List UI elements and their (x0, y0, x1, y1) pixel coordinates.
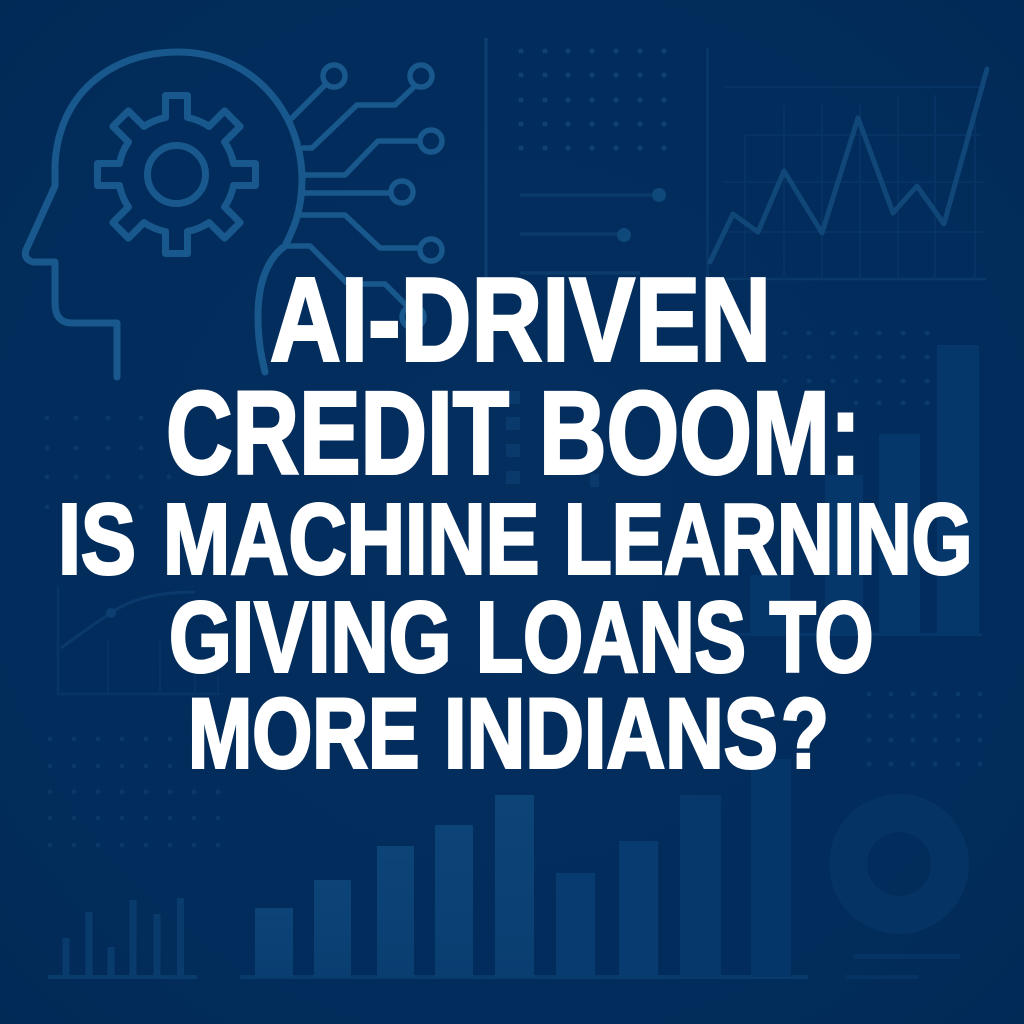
head outline (25, 52, 302, 377)
title line 2 (166, 368, 861, 500)
square dots behind title (506, 391, 599, 487)
title line 5: INDIANS (444, 678, 778, 788)
donut chart (845, 813, 960, 979)
small bar chart: bottom left (48, 898, 197, 979)
icon: AI head with gear and circuits (25, 52, 442, 377)
title line 3: MACHINE (163, 484, 540, 596)
title line 1: AI-DRIVEN (270, 254, 771, 386)
title line 5: MORE (188, 678, 420, 788)
slider indicators (520, 188, 666, 273)
title line 4: LOANS (476, 582, 746, 694)
dot grid: bottom left (48, 736, 220, 848)
dot grid: top right of bars (782, 330, 930, 406)
title line 4 (169, 582, 874, 694)
bar chart: right middle (712, 345, 982, 636)
line chart: top right (707, 48, 987, 279)
dot grid: left middle (44, 416, 172, 510)
title line 5: ? (781, 678, 829, 788)
title line 3: IS (58, 484, 136, 596)
small line chart: left (58, 587, 220, 694)
title (58, 254, 972, 788)
title line 5 (188, 678, 829, 788)
title line 3 (58, 484, 972, 596)
title line 4: GIVING (169, 582, 452, 694)
axis line (484, 38, 488, 282)
circuit traces (285, 65, 442, 328)
title line 2: CREDIT (166, 368, 509, 500)
large bar chart: bottom (240, 759, 808, 979)
gear (98, 96, 256, 254)
dot grid: bottom right (866, 692, 982, 766)
dot grid: top centre (518, 48, 667, 151)
title line 2: BOOM: (539, 368, 861, 500)
title line 4: TO (770, 582, 874, 694)
